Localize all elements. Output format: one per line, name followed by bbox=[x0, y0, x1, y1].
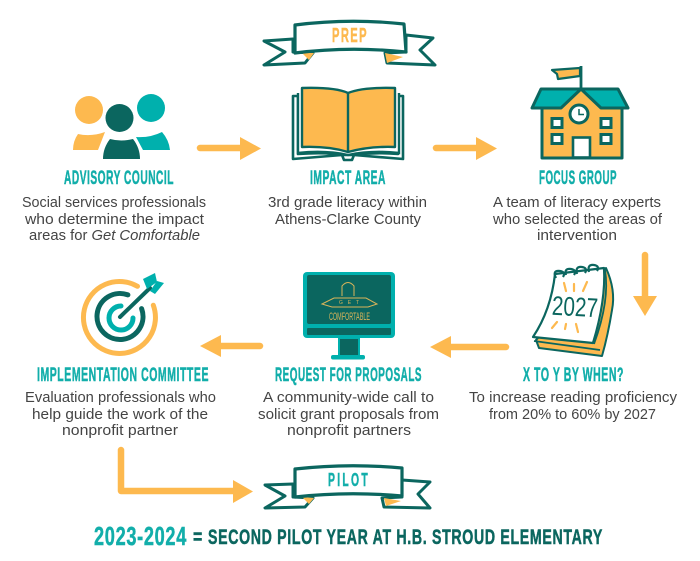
logo: Get Comfortable: GET bbox=[339, 300, 359, 306]
icon: calendar 2027: 2027 bbox=[551, 291, 599, 323]
panel: advisory council bbox=[22, 94, 206, 244]
arrow: implementation to pilot bbox=[121, 450, 253, 503]
text block bbox=[268, 194, 427, 228]
banner: PREP: PREP bbox=[332, 25, 368, 47]
text block bbox=[469, 389, 677, 423]
text block: nonprofit partner bbox=[62, 422, 178, 439]
text block: solicit grant proposals from bbox=[258, 406, 439, 423]
banner: PILOT bbox=[265, 466, 430, 508]
text block bbox=[25, 389, 216, 439]
icon: people bbox=[73, 94, 170, 159]
title: second pilot year bbox=[94, 521, 603, 551]
arrow: request to implementation bbox=[200, 335, 260, 357]
heading: FOCUS GROUP bbox=[539, 168, 617, 189]
heading: IMPLEMENTATION COMMITTEE bbox=[37, 365, 209, 386]
arrow: advisory to impact bbox=[200, 137, 261, 160]
text block: help guide the work of the bbox=[32, 406, 208, 423]
text block: intervention bbox=[537, 227, 617, 244]
text block: To increase reading proficiency bbox=[469, 389, 677, 406]
text block: Evaluation professionals who bbox=[25, 389, 216, 406]
text block: areas for Get Comfortable bbox=[29, 227, 200, 244]
logo: Get Comfortable bbox=[322, 282, 377, 323]
panel: X to Y by when bbox=[469, 265, 677, 423]
panel: focus group bbox=[492, 66, 663, 244]
banner: PREP bbox=[264, 21, 435, 65]
icon: target with arrow bbox=[83, 273, 164, 353]
icon: open book bbox=[293, 88, 403, 160]
arrow: focus to X to Y bbox=[633, 255, 657, 316]
text block bbox=[258, 389, 439, 439]
banner: PILOT: PILOT bbox=[328, 470, 370, 490]
panel: request for proposals bbox=[258, 272, 439, 439]
text block bbox=[492, 194, 663, 244]
panel: implementation committee bbox=[25, 273, 216, 439]
text block: A community-wide call to bbox=[263, 389, 434, 406]
icon: computer monitor bbox=[303, 272, 395, 360]
title: second pilot year: = bbox=[193, 526, 203, 549]
logo: Get Comfortable: COMFORTABLE bbox=[329, 311, 370, 323]
title: second pilot year: 2023-2024 bbox=[94, 521, 187, 551]
text block: Athens-Clarke County bbox=[275, 211, 421, 228]
text block: who determine the impact bbox=[24, 211, 205, 228]
text block: A team of literacy experts bbox=[493, 194, 661, 211]
text block: from 20% to 60% by 2027 bbox=[489, 406, 656, 423]
arrow: impact to focus bbox=[436, 137, 497, 160]
heading: REQUEST FOR PROPOSALS bbox=[275, 365, 422, 386]
heading: IMPACT AREA bbox=[310, 168, 386, 189]
text block: 3rd grade literacy within bbox=[268, 194, 427, 211]
text block: Social services professionals bbox=[22, 194, 206, 211]
icon: calendar 2027 bbox=[533, 265, 613, 356]
text block bbox=[22, 194, 206, 244]
panel: impact area bbox=[268, 88, 427, 228]
arrow: X to Y to request bbox=[430, 336, 506, 358]
icon: schoolhouse bbox=[532, 66, 628, 158]
text block: nonprofit partners bbox=[287, 422, 411, 439]
text block: who selected the areas of bbox=[492, 211, 663, 228]
heading: ADVISORY COUNCIL bbox=[64, 168, 174, 189]
